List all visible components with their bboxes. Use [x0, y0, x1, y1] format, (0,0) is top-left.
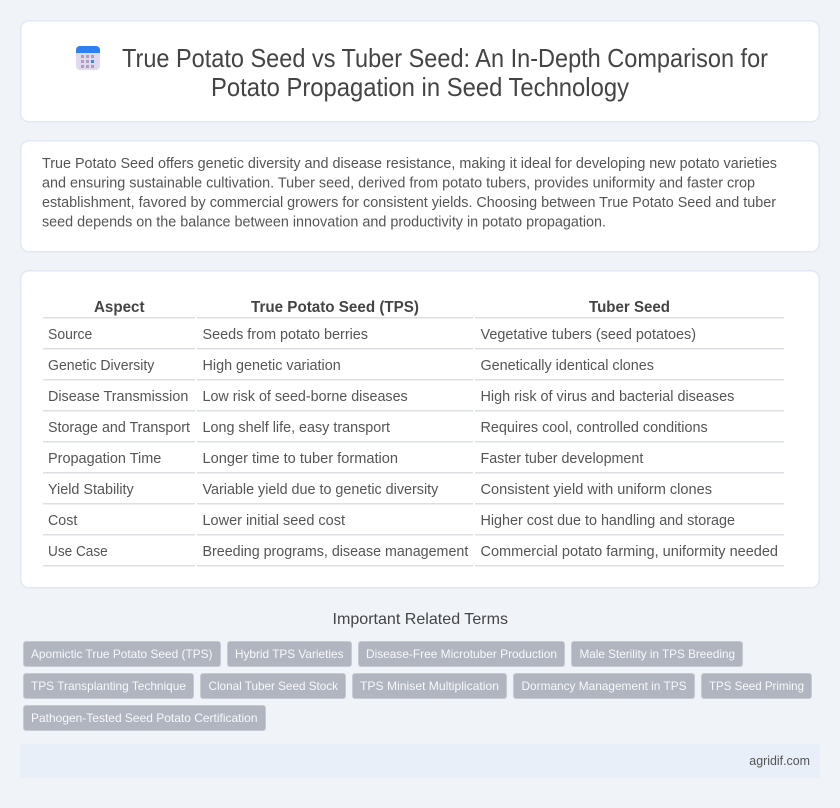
table row: Source	[48, 327, 696, 343]
table row: Disease Transmission	[48, 389, 734, 405]
title: True Potato Seed vs Tuber Seed: An In-Depth Comparison for	[122, 43, 768, 73]
table row: Propagation Time	[48, 451, 643, 467]
tag: TPS Seed Priming	[709, 679, 804, 693]
text block: introduction paragraph: establishment, favored by commercial growers for consistent yields. Choosing between True Potato Seed and tuber	[42, 195, 776, 211]
panel: introduction	[21, 141, 819, 252]
table row: Cost: Higher cost due to handling and storage	[480, 513, 735, 529]
tag: Male Sterility in TPS Breeding	[580, 647, 735, 661]
table row: Propagation Time: Longer time to tuber formation	[202, 451, 398, 467]
table row: Genetic Diversity: Genetically identical clones	[480, 358, 654, 374]
table row: Use Case: Breeding programs, disease management	[202, 544, 468, 560]
table row: Storage and Transport: Long shelf life, easy transport	[202, 420, 390, 436]
tag	[24, 674, 194, 698]
panel: header	[21, 21, 819, 122]
text block: introduction paragraph: and ensuring sustainable cultivation. Tuber seed, derived from potato tubers, provides uniformity and faster crop	[42, 176, 755, 192]
tag	[514, 674, 694, 698]
table row: Source: Source	[48, 327, 92, 343]
table row: Genetic Diversity: Genetic Diversity	[48, 358, 155, 374]
table row: Genetic Diversity	[48, 358, 654, 374]
tag: Apomictic True Potato Seed (TPS)	[31, 647, 212, 661]
table row: Yield Stability: Variable yield due to genetic diversity	[202, 482, 439, 498]
table header	[94, 299, 670, 316]
footer	[20, 744, 820, 778]
table row: Storage and Transport	[48, 420, 708, 436]
tag: Clonal Tuber Seed Stock	[208, 679, 339, 693]
tag	[200, 674, 346, 698]
table row: Source: Seeds from potato berries	[202, 327, 368, 343]
table header: Tuber Seed	[589, 299, 670, 316]
table row: Cost: Cost	[48, 513, 77, 529]
tag: Pathogen-Tested Seed Potato Certification	[31, 711, 258, 725]
text block: introduction paragraph: True Potato Seed offers genetic diversity and disease resistance, making it ideal for developing new potato varieties	[42, 156, 777, 172]
table row: Use Case	[48, 544, 778, 560]
tag	[702, 674, 812, 698]
table row: Storage and Transport: Requires cool, controlled conditions	[480, 420, 708, 436]
heading: important related terms: Important Related Terms	[332, 611, 508, 628]
tag: Disease-Free Microtuber Production	[366, 647, 557, 661]
tag: TPS Miniset Multiplication	[360, 679, 499, 693]
table row: Disease Transmission: Disease Transmission	[48, 389, 188, 405]
tag	[572, 642, 742, 666]
table row: Disease Transmission: High risk of virus and bacterial diseases	[480, 389, 734, 405]
table header: Aspect	[94, 299, 145, 316]
tag: Hybrid TPS Varieties	[235, 647, 344, 661]
table row: Cost: Lower initial seed cost	[202, 513, 345, 529]
title	[122, 43, 768, 102]
footer: agridif.com	[749, 753, 810, 768]
table row: Yield Stability: Consistent yield with uniform clones	[480, 482, 712, 498]
title: Potato Propagation in Seed Technology	[211, 72, 629, 102]
tag: Dormancy Management in TPS	[522, 679, 686, 693]
table row: Use Case: Commercial potato farming, uniformity needed	[480, 544, 778, 560]
table row: Disease Transmission: Low risk of seed-borne diseases	[202, 389, 408, 405]
text block: introduction paragraph	[42, 156, 777, 230]
table row: Yield Stability: Yield Stability	[48, 482, 134, 498]
tag	[358, 642, 564, 666]
tag: TPS Transplanting Technique	[31, 679, 186, 693]
tag	[228, 642, 352, 666]
tag	[352, 674, 506, 698]
related term tags	[24, 642, 812, 730]
table row: Storage and Transport: Storage and Transport	[48, 420, 190, 436]
tag	[24, 642, 220, 666]
table row: Source: Vegetative tubers (seed potatoes)	[480, 327, 696, 343]
tag	[24, 706, 266, 730]
table row: Cost	[48, 513, 735, 529]
table row: Genetic Diversity: High genetic variation	[202, 358, 341, 374]
table row: Propagation Time: Faster tuber development	[480, 451, 643, 467]
table header: True Potato Seed (TPS)	[251, 299, 419, 316]
table row: Use Case: Use Case	[48, 544, 108, 560]
icon: calendar	[76, 46, 100, 70]
table row: Propagation Time: Propagation Time	[48, 451, 161, 467]
panel: comparison table	[21, 271, 819, 588]
text block: introduction paragraph: seed depends on the balance between innovation and productivity in potato propagation.	[42, 214, 606, 230]
table row: Yield Stability	[48, 482, 712, 498]
